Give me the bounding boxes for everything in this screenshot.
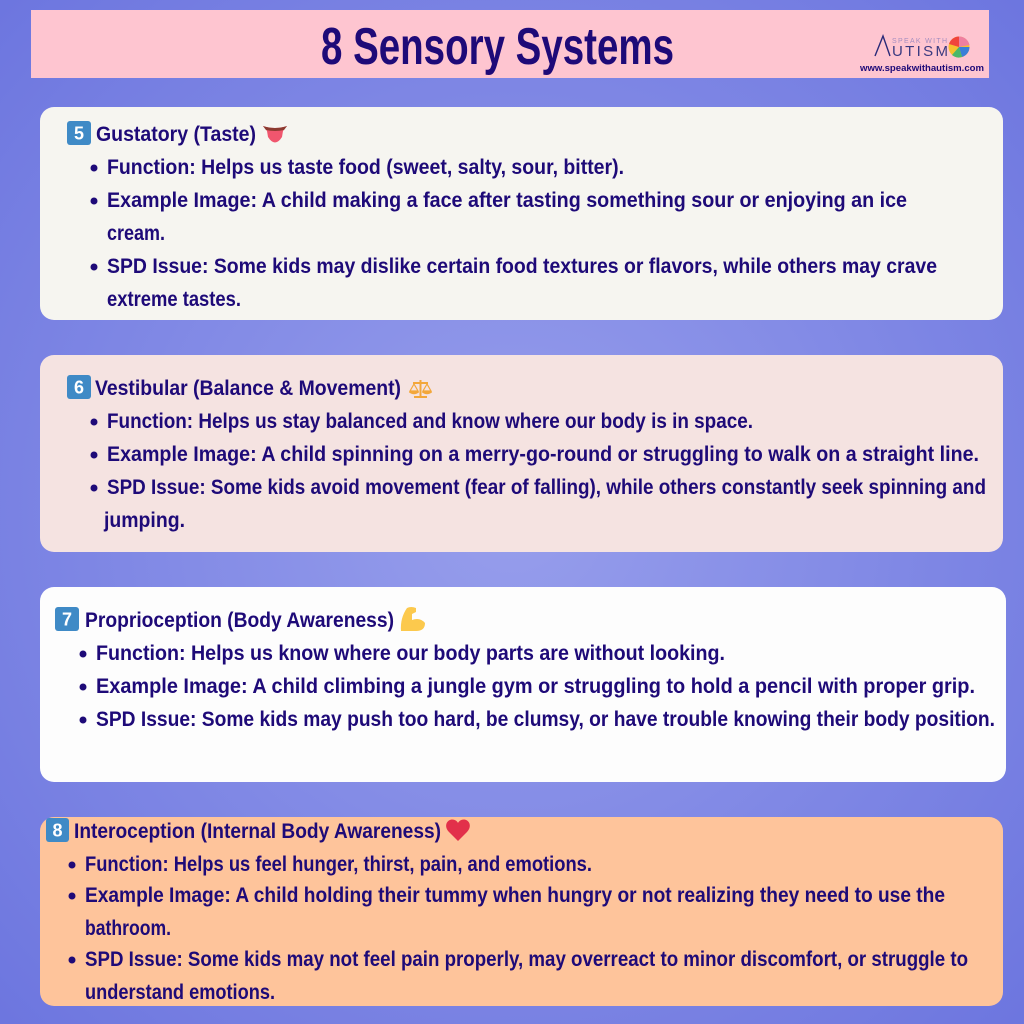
panel: interoception: [40, 817, 1003, 1006]
panel: proprioception: [40, 587, 1006, 782]
bullet list: vestibular: Example Image: A child spinning on a merry-go-round or struggling to walk on a straight line.: [107, 443, 979, 466]
bullet list: gustatory: Function: Helps us taste food (sweet, salty, sour, bitter).: [107, 156, 624, 179]
bullet list: interoception: understand emotions.: [85, 981, 275, 1004]
icon: tongue: [263, 126, 287, 142]
bullet list: proprioception: Example Image: A child climbing a jungle gym or struggling to hold a pencil with proper grip.: [96, 675, 975, 698]
bullet list: gustatory: cream.: [107, 222, 165, 245]
bullet list: vestibular: [90, 410, 986, 532]
bullet list: interoception: [68, 853, 968, 1004]
number badge 6: [67, 375, 91, 399]
logo: [859, 36, 984, 74]
number badge 7: [55, 607, 79, 631]
bullet list: gustatory: Example Image: A child making a face after tasting something sour or enjoying an ice: [107, 189, 907, 212]
bullet list: vestibular: jumping.: [103, 509, 185, 532]
bullet list: gustatory: extreme tastes.: [107, 288, 241, 311]
heading: proprioception: Proprioception (Body Awareness): [85, 609, 394, 632]
number badge 8: [46, 818, 69, 842]
bullet list: interoception: Function: Helps us feel hunger, thirst, pain, and emotions.: [85, 853, 592, 876]
panel: gustatory: [40, 107, 1003, 320]
logo: SPEAK WITH: [892, 38, 947, 45]
bullet list: gustatory: [90, 156, 937, 311]
bullet list: interoception: bathroom.: [85, 917, 171, 940]
number badge 8: 8: [52, 820, 63, 840]
icon: balance scale: [410, 380, 432, 397]
number badge 5: [67, 121, 91, 145]
number badge 7: 7: [62, 610, 72, 630]
heading: gustatory: Gustatory (Taste): [96, 123, 256, 146]
icon: flexed arm: [401, 607, 425, 631]
bullet list: proprioception: [80, 642, 995, 731]
header banner: [31, 10, 989, 78]
bullet list: proprioception: Function: Helps us know where our body parts are without looking.: [96, 642, 725, 665]
icon: heart: [446, 820, 470, 841]
logo: UTISM: [892, 43, 948, 60]
panel: vestibular: [40, 355, 1003, 552]
number badge 6: 6: [74, 378, 84, 398]
number badge 5: 5: [74, 124, 84, 144]
bullet list: gustatory: SPD Issue: Some kids may dislike certain food textures or flavors, while others may crave: [107, 255, 937, 278]
bullet list: vestibular: Function: Helps us stay balanced and know where our body is in space.: [107, 410, 753, 433]
logo: www.speakwithautism.com: [859, 63, 984, 74]
heading: interoception: Interoception (Internal Body Awareness): [74, 820, 441, 843]
bullet list: interoception: Example Image: A child holding their tummy when hungry or not realizing they need to use the: [85, 884, 945, 907]
heading: vestibular: Vestibular (Balance & Movement): [95, 377, 401, 400]
title: 8 Sensory Systems: [321, 18, 674, 76]
